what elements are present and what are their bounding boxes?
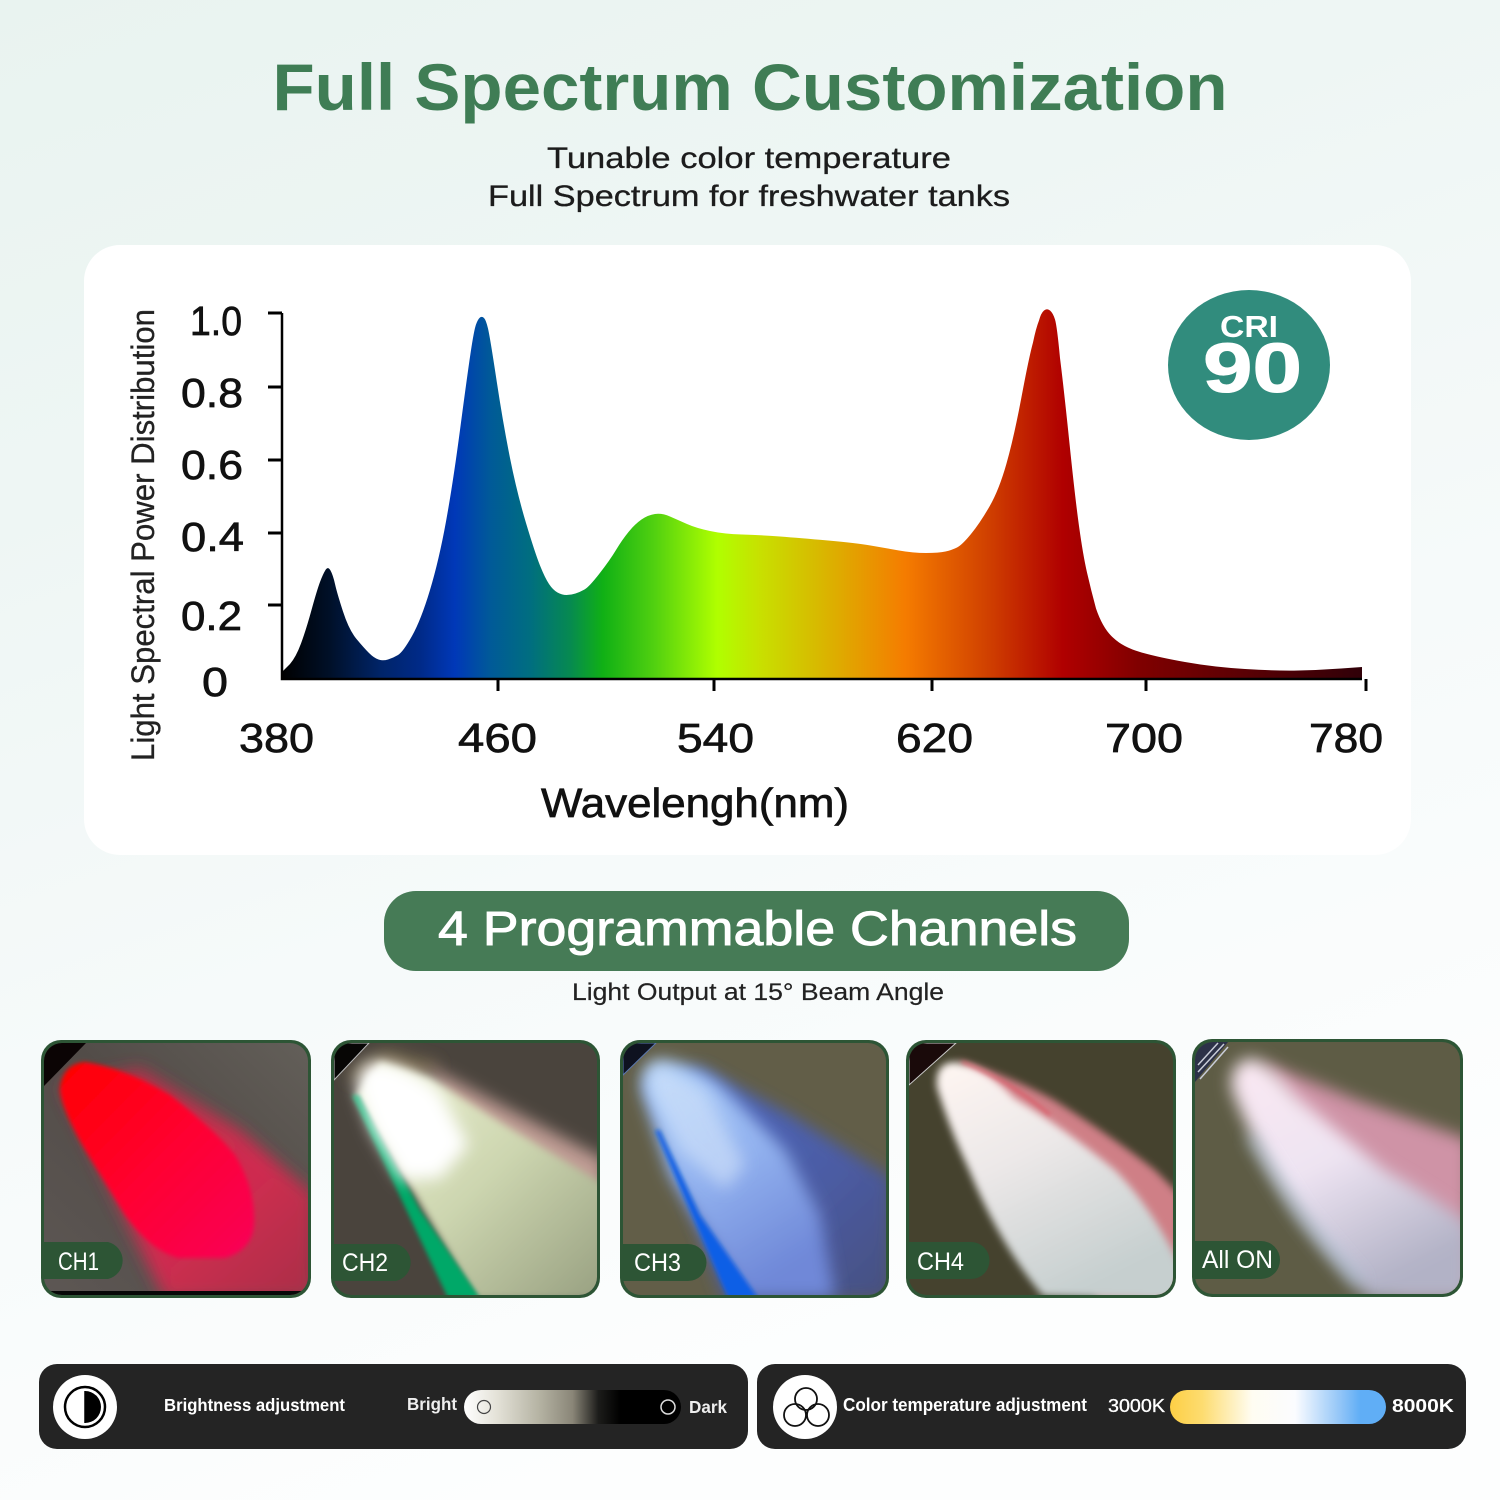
card: CH3 [620, 1040, 892, 1300]
spectrum area [282, 309, 1362, 678]
axes [268, 313, 1366, 691]
label: Color temperature adjustment [843, 1395, 1087, 1415]
card: CH1 [41, 1040, 315, 1300]
x tick labels: 780 [1309, 715, 1383, 761]
x tick labels: 460 [458, 715, 537, 761]
badge: CRI 90: CRI [1220, 309, 1278, 344]
title: Full Spectrum Customization [272, 50, 1228, 124]
y tick labels [181, 298, 244, 705]
label: Dark: Dark [689, 1397, 727, 1417]
heading pill: 4 Programmable Channels: 4 Programmable Channels [438, 903, 1077, 956]
icon: color circles [773, 1375, 837, 1439]
x axis title: Wavelengh(nm) [541, 780, 849, 826]
badge: CRI 90 [1168, 290, 1330, 440]
x tick labels: 380 [239, 715, 314, 761]
label: CH1: CH1 [58, 1248, 99, 1276]
y axis title: Light Spectral Power Distribution [125, 309, 161, 761]
x tick labels: 540 [677, 715, 754, 761]
x tick labels [239, 715, 1383, 761]
control bar: brightness [39, 1364, 748, 1449]
label: CH3: CH3 [634, 1249, 681, 1277]
y tick labels: 0.2 [181, 593, 242, 639]
x tick labels: 620 [896, 715, 973, 761]
label: All ON: All ON [1202, 1246, 1273, 1274]
subtitle: Tunable color temperature [547, 142, 951, 175]
control bar: color temperature [757, 1364, 1466, 1449]
label: CH1 [44, 1242, 123, 1279]
label: 3000K: 3000K [1108, 1396, 1165, 1416]
card: CH4 [906, 1040, 1180, 1300]
label: All ON [1195, 1241, 1280, 1279]
card: CH2 [331, 1040, 605, 1300]
label: CH2 [334, 1244, 411, 1281]
heading pill: 4 Programmable Channels [384, 891, 1129, 971]
slider: brightness [464, 1390, 681, 1424]
label: CH4: CH4 [917, 1248, 964, 1276]
badge: CRI 90: 90 [1203, 329, 1302, 407]
label: CH3 [623, 1244, 706, 1281]
y tick labels: 0.4 [181, 514, 244, 560]
y tick labels: 0.6 [181, 442, 243, 488]
x tick labels: 700 [1105, 715, 1183, 761]
y tick labels: 0 [202, 659, 228, 705]
label: CH4 [909, 1242, 990, 1279]
label: CH2: CH2 [342, 1249, 388, 1277]
panel: spectrum chart [84, 245, 1411, 855]
slider: color temperature [1170, 1390, 1386, 1424]
label: Bright: Bright [407, 1394, 457, 1414]
caption: Light Output at 15° Beam Angle [572, 979, 944, 1006]
y tick labels: 0.8 [181, 370, 243, 416]
card: All ON [1192, 1039, 1470, 1300]
label: 8000K: 8000K [1392, 1396, 1454, 1416]
label: Brightness adjustment [164, 1395, 345, 1415]
subtitle [488, 142, 1010, 213]
y tick labels: 1.0 [190, 298, 242, 344]
icon: brightness [53, 1375, 117, 1439]
subtitle: Full Spectrum for freshwater tanks [488, 180, 1010, 213]
